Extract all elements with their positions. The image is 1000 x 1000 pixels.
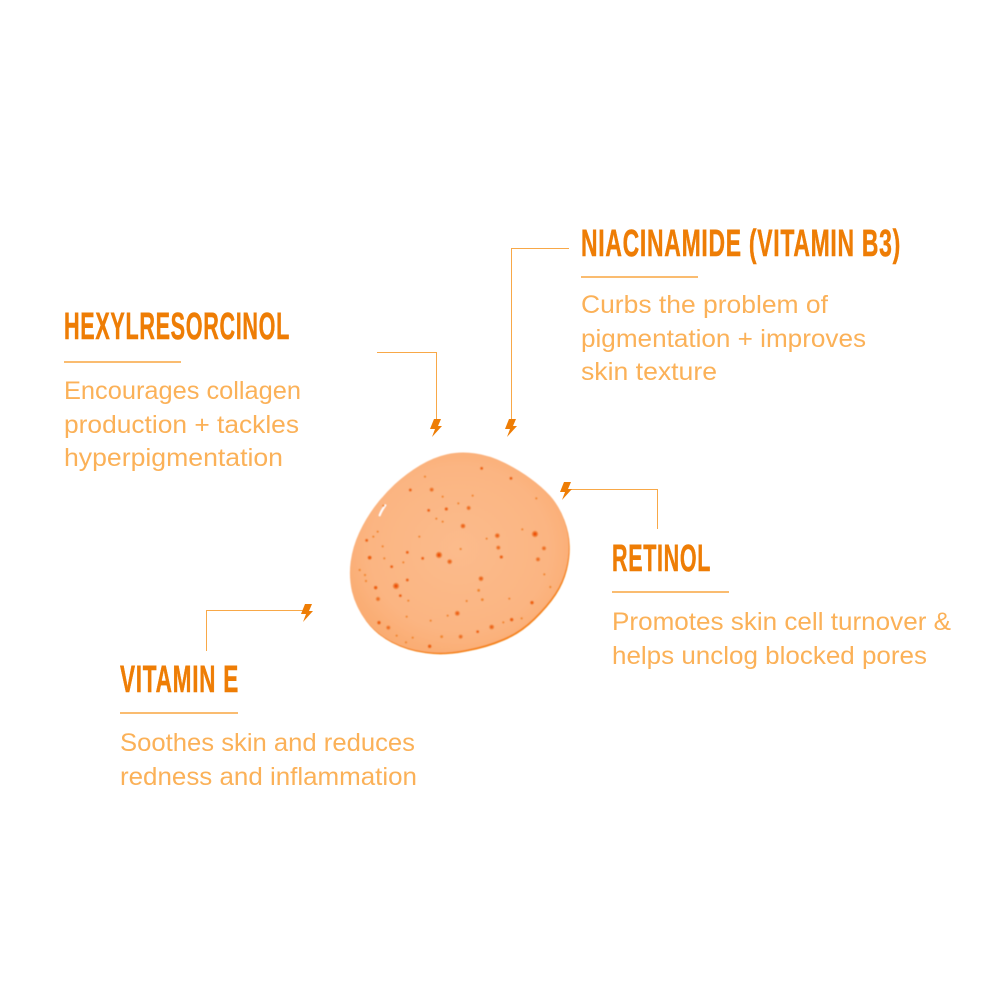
text: niacinamide description: Curbs the problem of <box>581 291 828 319</box>
blob darker rim <box>351 454 570 654</box>
text: retinol description <box>612 608 951 670</box>
callout: retinol <box>560 482 951 670</box>
blob body <box>350 453 569 653</box>
icon: bolt retinol <box>560 482 572 500</box>
underline: retinol <box>612 591 729 593</box>
underline: vitamin e <box>120 712 238 714</box>
text: vitamin e description: Soothes skin and reduces <box>120 729 415 757</box>
callout: hexylresorcinol <box>64 306 442 472</box>
medium bubbles <box>365 467 534 648</box>
text: hexylresorcinol description <box>64 377 301 472</box>
connector arrow: retinol <box>570 490 658 529</box>
highlight <box>380 505 385 515</box>
small bubbles <box>359 476 551 643</box>
connector arrow: vitamin e <box>206 610 303 651</box>
text: niacinamide description: skin texture <box>581 358 717 386</box>
callout: niacinamide <box>505 223 901 437</box>
text: hexylresorcinol description: hyperpigmentation <box>64 444 283 472</box>
underline: niacinamide <box>581 276 698 278</box>
text: retinol description: Promotes skin cell turnover & <box>612 608 951 636</box>
text: retinol description: helps unclog blocked pores <box>612 642 927 670</box>
text: niacinamide description <box>581 291 866 386</box>
serum blob with bubbles <box>350 453 570 654</box>
heading: hexylresorcinol: HEXYLRESORCINOL <box>64 306 290 348</box>
large bubbles <box>377 488 545 638</box>
icon: bolt niacinamide <box>505 419 517 437</box>
callout: vitamin e <box>120 604 417 791</box>
text: vitamin e description <box>120 729 417 791</box>
connector arrow: hexylresorcinol <box>377 352 436 420</box>
icon: bolt hexylresorcinol <box>430 419 442 437</box>
underline: hexylresorcinol <box>64 361 181 363</box>
heading: retinol: RETINOL <box>612 538 711 580</box>
heading: vitamin e: VITAMIN E <box>120 659 239 701</box>
connector arrow: niacinamide <box>512 248 569 420</box>
icon: bolt vitamin e <box>301 604 313 622</box>
text: hexylresorcinol description: production + tackles <box>64 411 299 439</box>
text: vitamin e description: redness and inflammation <box>120 763 417 791</box>
text: hexylresorcinol description: Encourages collagen <box>64 377 301 405</box>
text: niacinamide description: pigmentation + improves <box>581 325 866 353</box>
